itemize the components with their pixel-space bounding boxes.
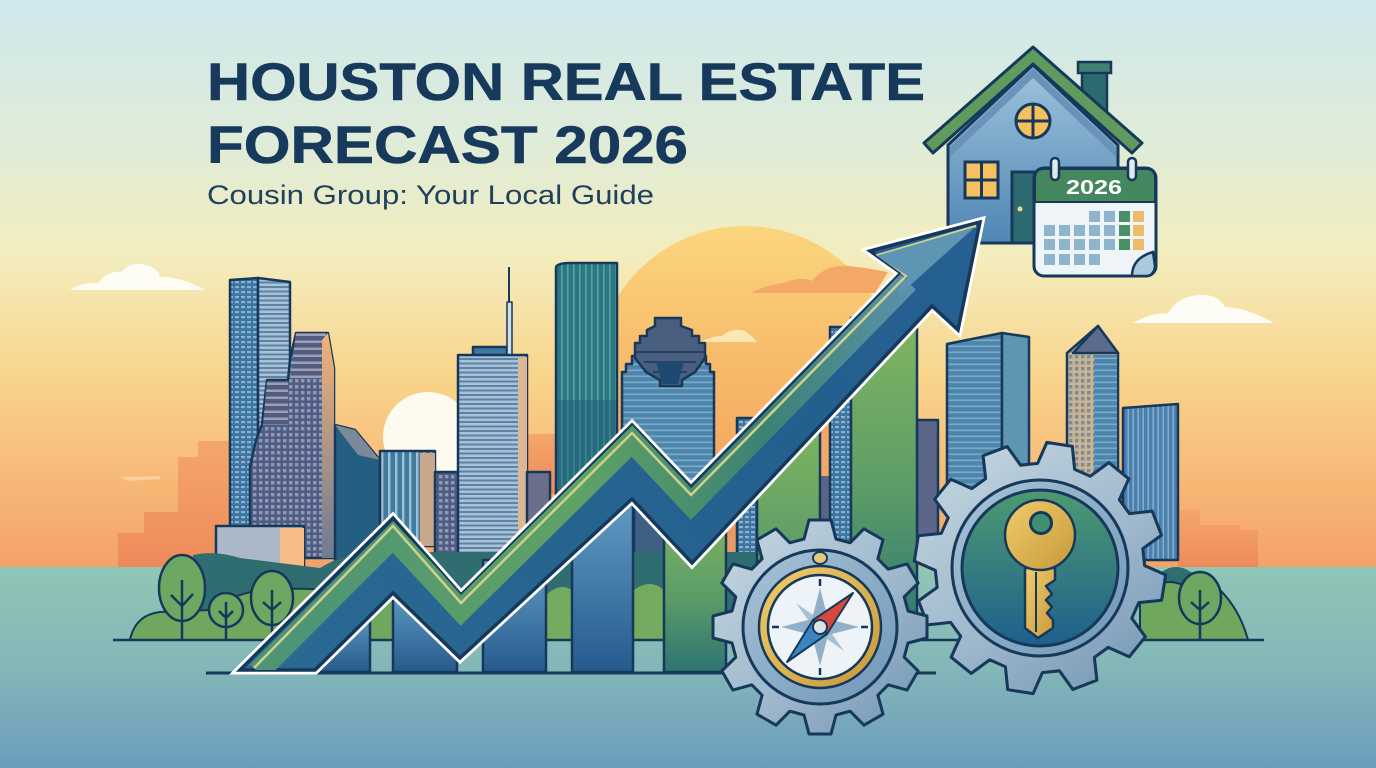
arrow outline [240,222,980,670]
gear body [713,520,927,734]
tree: large left [159,555,205,639]
compass needle [787,593,853,662]
tower: right tan pointed building [1067,326,1118,490]
bar chart [320,318,917,672]
upper ground line [113,639,1264,641]
calendar page [1034,168,1156,276]
water and ground background [0,567,1376,768]
calendar page curl [1132,252,1155,276]
tower: teal cylinder [556,263,617,500]
key gear [897,425,1183,711]
foliage band left [130,552,760,640]
tree: right [1179,572,1221,639]
roof [924,47,1142,153]
compass face [768,575,872,679]
arrow green band [254,226,976,672]
compass ticks [772,579,868,675]
building: small purple block [435,472,459,556]
skyline buildings [216,263,1178,570]
icon: key [1005,500,1075,638]
title: FORECAST 2026 [207,116,688,175]
tree: medium left [251,571,293,639]
tower: right glass building [947,333,1029,490]
tower: left twin-face skyscraper [230,278,290,530]
building: striped mid-rise [380,451,435,546]
house icon [924,47,1142,243]
foliage right [1140,567,1248,640]
title [207,53,925,175]
compass gold ring [759,566,881,688]
tower: stepped purple skyscraper [250,333,334,558]
tower: narrow strip behind bars [820,327,851,552]
gear ring [743,550,897,704]
compass gear [713,520,927,734]
lower ground line [206,672,936,674]
tower: right striped building [1123,404,1178,560]
tower: narrow behind arrow [727,418,757,554]
calendar year: 2026 [1066,177,1122,199]
tower: stepped crown skyscraper [622,318,714,520]
compass star [781,588,859,666]
tower: spire skyscraper [458,267,527,560]
round attic window [1016,104,1050,138]
calendar header [1035,169,1155,202]
building: purple behind gear [917,420,938,540]
small white sun [383,392,473,482]
sky background [0,0,1376,568]
calendar icon [1034,158,1156,276]
tree: small left [209,593,243,639]
key background disc [962,490,1118,646]
title: HOUSTON REAL ESTATE [207,53,925,112]
square window [965,162,998,198]
building: dark block between bars [634,505,665,565]
chimney [1078,62,1111,122]
zigzag growth arrow [240,222,980,672]
under-roof shadow [950,68,1116,157]
compass loop [813,552,827,564]
calendar grid [1044,211,1144,265]
building: gray block [527,472,550,542]
house wall [948,65,1118,243]
arrow body [240,222,980,670]
large setting sun [595,226,895,526]
gear body [897,425,1183,711]
tower: slanted teal building [335,425,380,560]
door [1012,172,1038,243]
distant orange buildings [118,434,1258,567]
subtitle: Cousin Group: Your Local Guide [207,180,654,210]
gear ring [952,480,1128,656]
building: low block [216,526,304,570]
calendar rings [1051,158,1136,180]
clouds [70,264,1274,481]
